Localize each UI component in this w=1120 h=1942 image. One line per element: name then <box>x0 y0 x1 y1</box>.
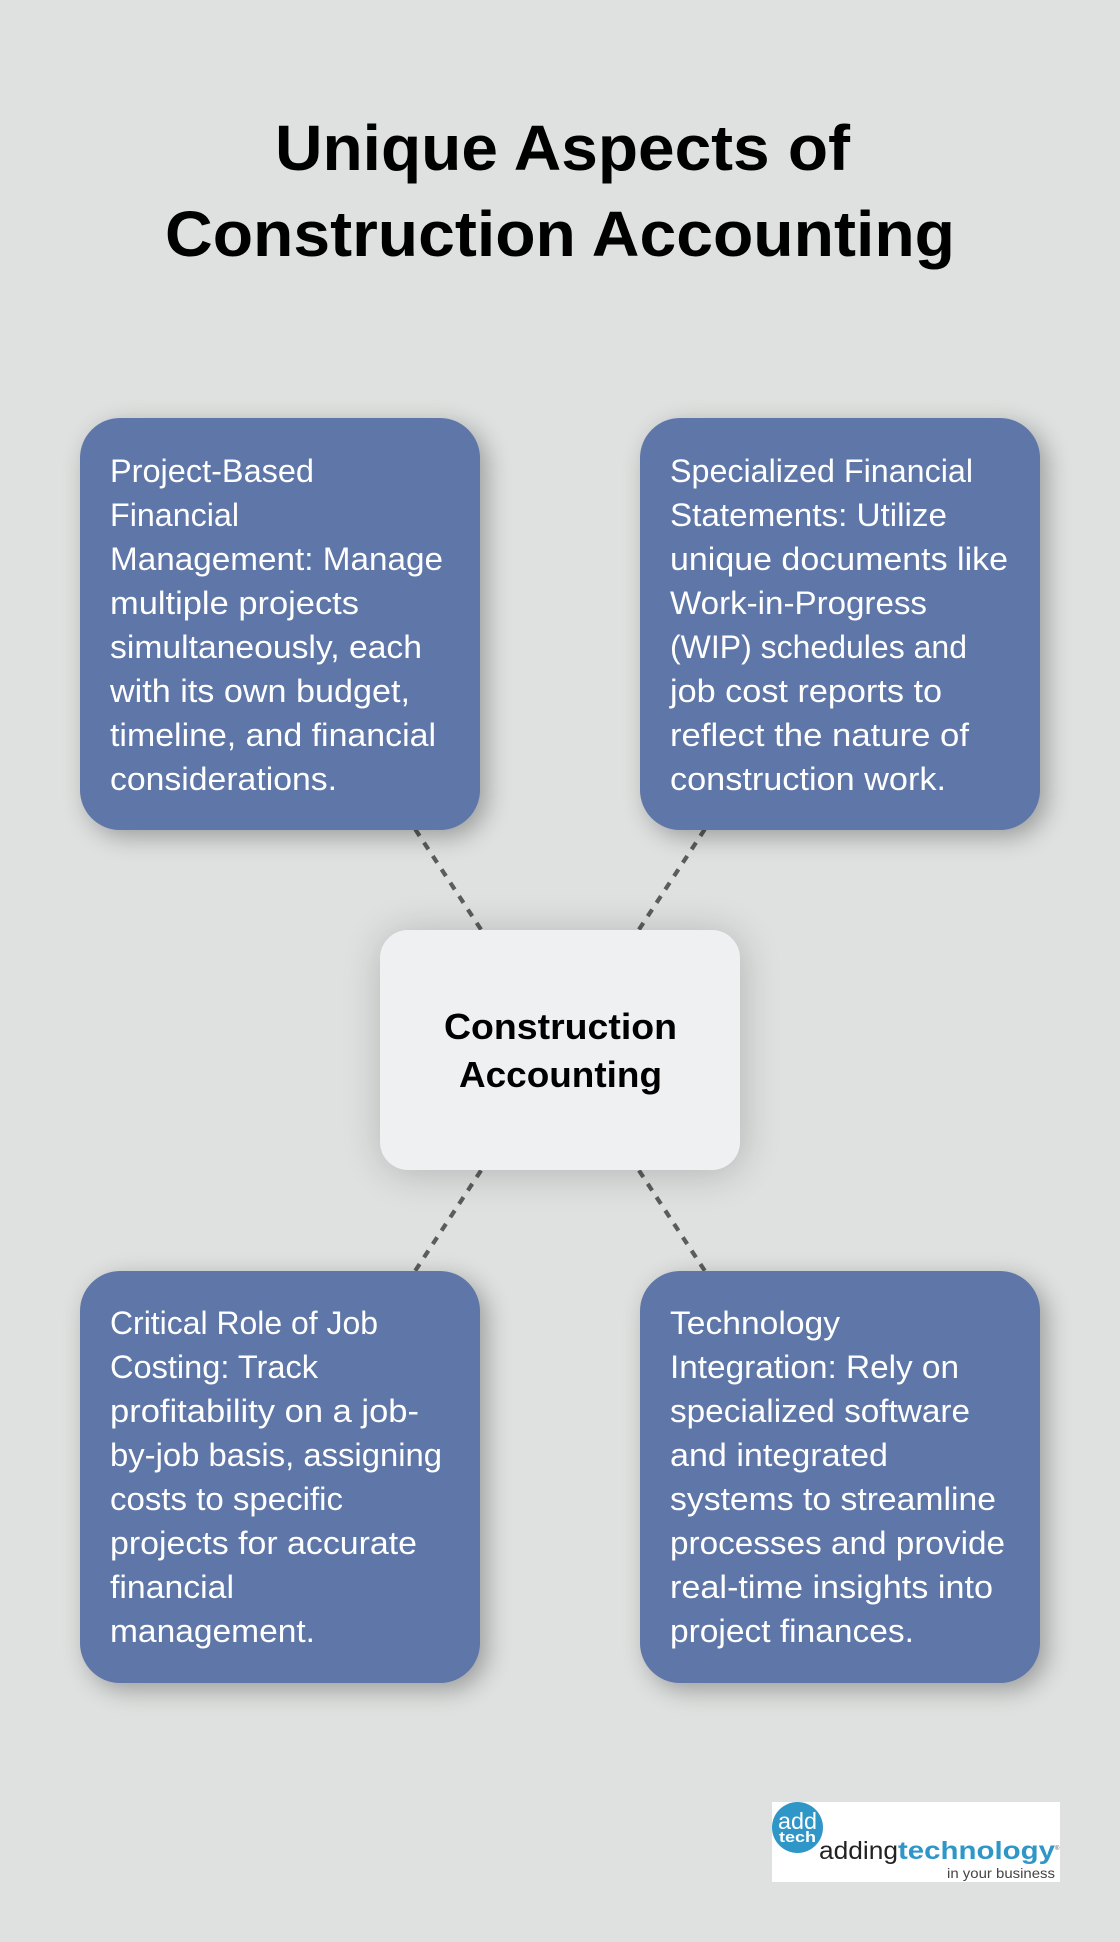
central label <box>444 1006 677 1095</box>
text: specialized financial statements: construction work. <box>670 761 946 797</box>
text: project-based financial management: Project-Based <box>110 453 314 489</box>
text: technology integration: systems to streamline <box>670 1481 996 1517</box>
text: critical role of job costing: projects for accurate <box>110 1525 417 1561</box>
text: specialized financial statements: unique documents like <box>670 541 1008 577</box>
central label: Construction <box>444 1006 677 1047</box>
logo: adding technology <box>772 1802 1060 1882</box>
text: technology integration: processes and provide <box>670 1525 1005 1561</box>
text: critical role of job costing: Critical Role of Job <box>110 1305 378 1341</box>
title <box>165 112 955 270</box>
text: specialized financial statements: Work-in-Progress <box>670 585 927 621</box>
text: critical role of job costing: management. <box>110 1613 315 1649</box>
title: Unique Aspects of <box>275 112 851 184</box>
logo artwork <box>772 1802 1060 1881</box>
text: critical role of job costing: costs to specific <box>110 1481 343 1517</box>
text: project-based financial management: considerations. <box>110 761 337 797</box>
text: critical role of job costing: profitability on a job- <box>110 1393 419 1429</box>
central label: Accounting <box>459 1054 662 1095</box>
text: critical role of job costing: Costing: Track <box>110 1349 319 1385</box>
text: project-based financial management: simultaneously, each <box>110 629 422 665</box>
text: technology integration <box>670 1305 1005 1649</box>
text: project-based financial management: Management: Manage <box>110 541 443 577</box>
text: technology integration: Integration: Rely on <box>670 1349 959 1385</box>
panel: project-based financial management <box>80 418 480 830</box>
logo artwork: in your business <box>947 1865 1055 1881</box>
text: technology integration: and integrated <box>670 1437 888 1473</box>
logo artwork: add <box>778 1808 817 1834</box>
text: specialized financial statements: reflect the nature of <box>670 717 970 753</box>
text: technology integration: Technology <box>670 1305 841 1341</box>
text: critical role of job costing: financial <box>110 1569 234 1605</box>
panel: specialized financial statements <box>640 418 1040 830</box>
logo artwork: ® <box>1055 1845 1060 1852</box>
panel: critical role of job costing <box>80 1271 480 1683</box>
logo artwork: technology <box>898 1837 1055 1865</box>
text: specialized financial statements: job cost reports to <box>669 673 942 709</box>
text: project-based financial management: timeline, and financial <box>110 717 436 753</box>
text: project-based financial management: multiple projects <box>110 585 359 621</box>
text: project-based financial management <box>109 453 443 797</box>
text: specialized financial statements: Specialized Financial <box>670 453 973 489</box>
text: technology integration: project finances. <box>670 1613 914 1649</box>
text: specialized financial statements: Statements: Utilize <box>670 497 947 533</box>
text: critical role of job costing <box>110 1305 442 1649</box>
text: technology integration: real-time insights into <box>670 1569 993 1605</box>
text: project-based financial management: with its own budget, <box>109 673 410 709</box>
text: critical role of job costing: by-job basis, assigning <box>110 1437 442 1473</box>
logo artwork: tech <box>779 1829 816 1846</box>
panel: technology integration <box>640 1271 1040 1683</box>
panel: central node <box>380 930 740 1170</box>
text: specialized financial statements: (WIP) schedules and <box>670 629 967 665</box>
title: Construction Accounting <box>165 198 955 270</box>
text: specialized financial statements <box>669 453 1008 797</box>
logo artwork: adding <box>819 1837 898 1865</box>
text: technology integration: specialized software <box>670 1393 970 1429</box>
text: project-based financial management: Financial <box>110 497 239 533</box>
